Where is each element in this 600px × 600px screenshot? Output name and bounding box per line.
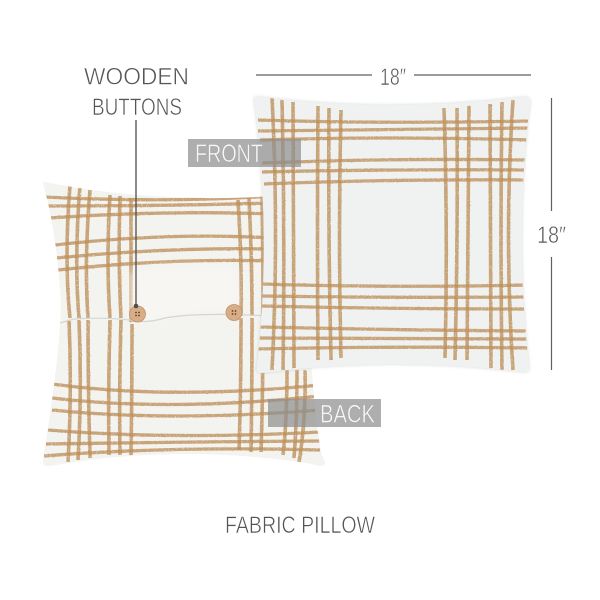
dimension: height 18 inches: 18″ [537, 222, 566, 249]
front pillow plaid: vertical stripes [272, 98, 513, 370]
callout: wooden buttons: BUTTONS [92, 94, 182, 121]
dimension: width 18 inches: 18″ [380, 64, 406, 91]
front pillow plaid: horizontal stripes [257, 120, 530, 349]
callout: wooden buttons [84, 64, 189, 308]
back pillow button flap [60, 267, 268, 323]
panel: back pillow [43, 182, 325, 466]
back pillow plaid: vertical stripes [67, 185, 305, 462]
title: fabric pillow: FABRIC PILLOW [225, 512, 375, 539]
icon: wooden button left [130, 306, 146, 322]
label: FRONT: FRONT [195, 140, 263, 168]
callout: wooden buttons: WOODEN [84, 64, 189, 90]
label: BACK [268, 399, 381, 428]
label: BACK: BACK [320, 400, 375, 428]
back pillow plaid: horizontal stripes [44, 196, 320, 456]
icon: wooden button right [226, 304, 242, 320]
panel: front pillow [254, 97, 530, 373]
